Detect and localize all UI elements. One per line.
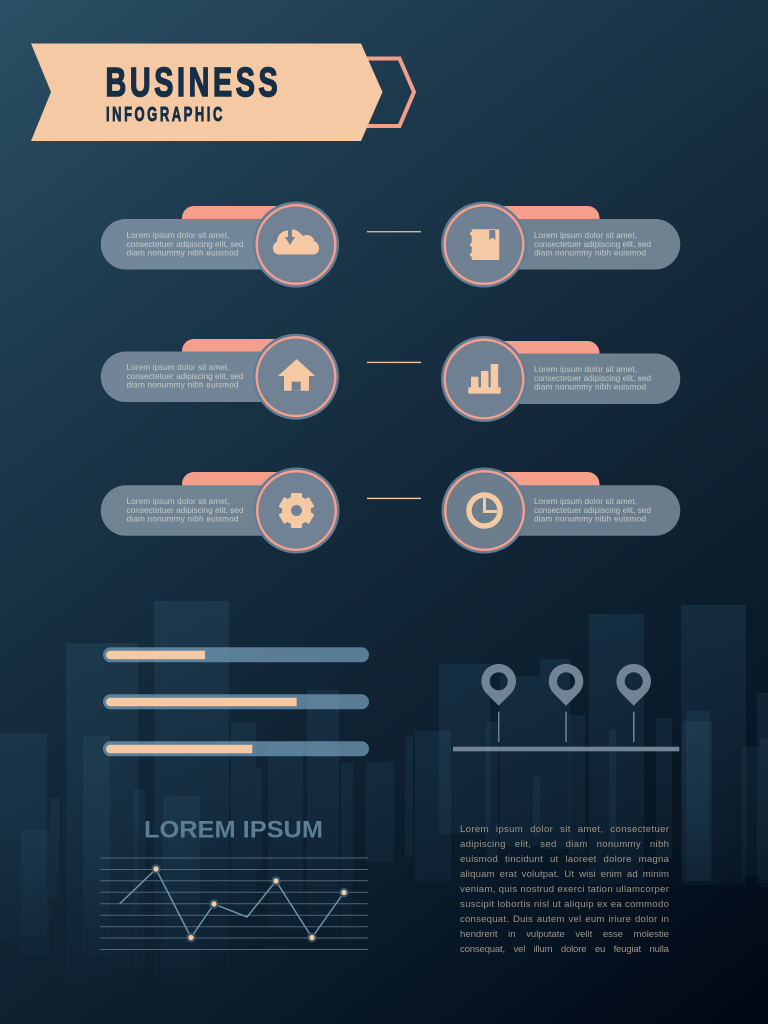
pin 3 (616, 664, 651, 742)
city skyline (0, 601, 768, 1021)
progress bars (103, 647, 369, 756)
card: cloud download (101, 204, 337, 286)
text (126, 230, 244, 258)
body paragraph: aliquam erat volutpat. Ut wisi enim ad minim (460, 869, 669, 880)
text: consectetuer adipiscing elit, sed (534, 505, 651, 515)
tab (490, 341, 600, 360)
body paragraph: veniam, quis nostrud exerci tation ullamcorper (460, 884, 670, 895)
text (534, 496, 651, 524)
badge (255, 336, 337, 418)
tab (182, 206, 290, 225)
text: consectetuer adipiscing elit, sed (534, 373, 651, 383)
badge (443, 204, 525, 286)
pin 1 (481, 664, 516, 742)
subtitle: INFOGRAPHIC (106, 103, 222, 126)
text: Lorem ipsum dolor sit amet, (534, 230, 637, 240)
pin 2 (549, 664, 583, 742)
text: consectetuer adipiscing elit, sed (126, 371, 244, 381)
card: house (101, 336, 337, 418)
banner outline arrow (362, 58, 414, 126)
badge (255, 204, 337, 286)
icon: clock (469, 495, 500, 526)
text: Lorem ipsum dolor sit amet, (126, 496, 230, 506)
data points (151, 864, 349, 942)
pill (484, 354, 680, 404)
body paragraph (460, 824, 670, 955)
text: diam nonummy nibh euismod (126, 380, 239, 390)
line chart heading: LOREM IPSUM (144, 816, 323, 843)
body paragraph: euismod tincidunt ut laoreet dolore magna (460, 854, 670, 865)
body paragraph: Lorem ipsum dolor sit amet, consectetuer (460, 824, 670, 835)
map pins timeline (453, 664, 679, 751)
text: consectetuer adipiscing elit, sed (534, 239, 651, 249)
card: bar chart (443, 338, 680, 420)
pill (484, 219, 680, 270)
data line (120, 869, 344, 938)
text: consectetuer adipiscing elit, sed (126, 239, 244, 249)
line chart (100, 858, 368, 950)
title: BUSINESS (106, 60, 278, 105)
connector line 3 (367, 498, 421, 499)
text: consectetuer adipiscing elit, sed (126, 505, 244, 515)
card: gear (101, 470, 338, 552)
text: diam nonummy nibh euismod (534, 514, 646, 524)
badge (256, 470, 338, 552)
pill (101, 219, 296, 270)
icon: cloud download (273, 228, 319, 255)
text: Lorem ipsum dolor sit amet, (534, 364, 637, 374)
body paragraph: consequat. Duis autem vel eum iriure dolor in (460, 914, 669, 925)
text: diam nonummy nibh euismod (126, 514, 239, 524)
icon: house (278, 359, 315, 391)
card: notebook (443, 204, 680, 286)
pill (484, 485, 680, 536)
text: Lorem ipsum dolor sit amet, (126, 230, 230, 240)
text: diam nonummy nibh euismod (126, 248, 239, 258)
tab (490, 472, 600, 491)
title banner (31, 44, 414, 141)
bar 1 (103, 647, 369, 662)
body paragraph: adipiscing elit, sed diam nonummy nibh (460, 839, 669, 850)
badge (444, 470, 526, 552)
text (126, 496, 244, 524)
text: diam nonummy nibh euismod (534, 248, 646, 258)
tab (182, 472, 290, 491)
pill (101, 352, 296, 402)
banner ribbon (31, 44, 382, 141)
baseline (453, 747, 679, 751)
body paragraph: suscipit lobortis nisl ut aliquip ex ea commodo (460, 899, 669, 910)
badge (443, 338, 525, 420)
body paragraph: consequat, vel illum dolore eu feugiat nulla (460, 944, 670, 955)
icon: notebook (470, 229, 499, 260)
connector line 2 (367, 362, 421, 363)
text (534, 230, 651, 258)
icon: gear (279, 493, 314, 528)
icon: bar chart (468, 364, 501, 394)
body paragraph: hendrerit in vulputate velit esse molestie (460, 929, 669, 940)
tab (182, 339, 290, 358)
text: Lorem ipsum dolor sit amet, (534, 496, 637, 506)
bar 3 (103, 741, 369, 756)
text (534, 364, 651, 392)
tab (490, 206, 600, 225)
connector line 1 (367, 231, 421, 232)
pill (101, 485, 296, 536)
card: clock (444, 470, 680, 552)
text (126, 362, 244, 390)
text: diam nonummy nibh euismod (534, 382, 646, 392)
text: Lorem ipsum dolor sit amet, (126, 362, 230, 372)
bar 2 (103, 694, 369, 709)
